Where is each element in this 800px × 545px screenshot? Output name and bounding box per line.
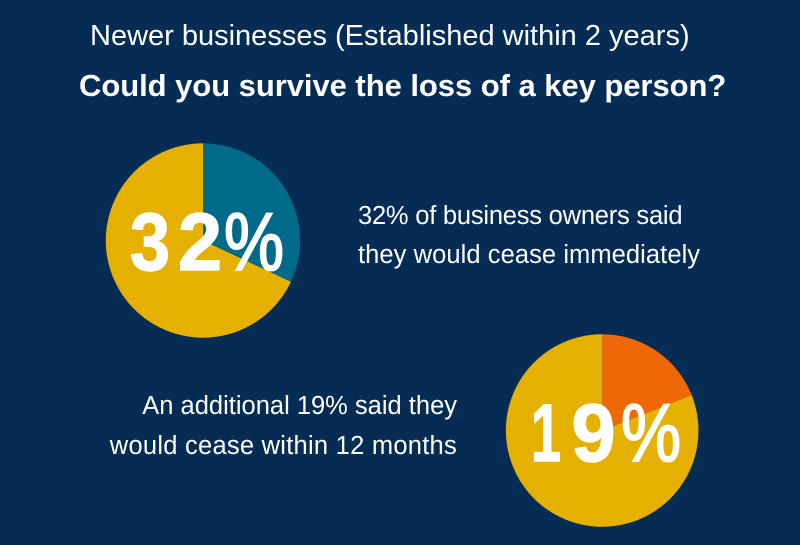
pie chart: 32%: % [224, 197, 284, 288]
pie chart: 32% [106, 143, 300, 338]
heading: subtitle: Newer businesses (Established within 2 years) [90, 20, 690, 52]
pie chart: 19% [506, 334, 698, 527]
text block: 19% description: An additional 19% said they [142, 392, 457, 420]
text block: 32% description: they would cease immediately [358, 241, 700, 269]
heading: title: Could you survive the loss of a key person? [79, 68, 726, 103]
pie chart: 19%: 1 [531, 388, 561, 479]
pie chart: 32%: 2 [178, 197, 222, 288]
text block: 19% description: would cease within 12 months [110, 432, 457, 460]
text block: 32% description: 32% of business owners said [358, 202, 682, 230]
text block: 19% description [110, 392, 457, 460]
pie chart: 19%: 9 [572, 388, 616, 479]
pie chart: 19%: % [621, 388, 681, 479]
pie chart: 32%: 3 [130, 197, 170, 288]
text block: 32% description [358, 202, 700, 269]
